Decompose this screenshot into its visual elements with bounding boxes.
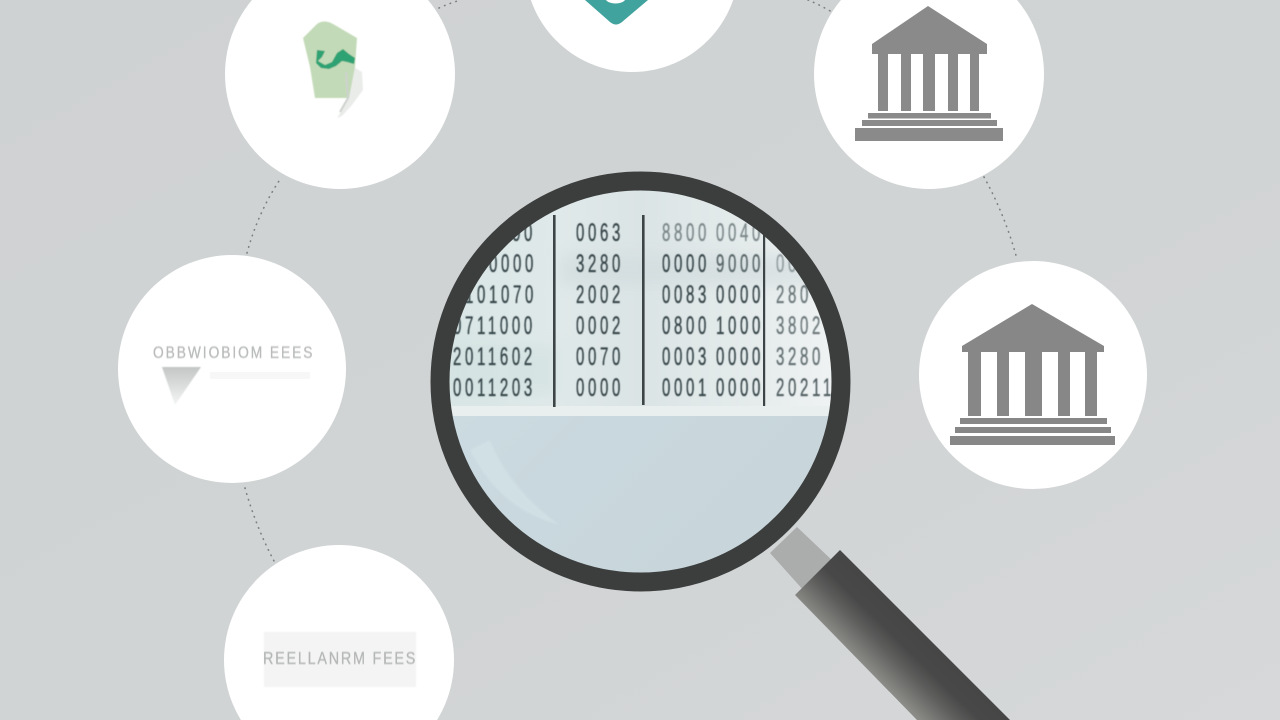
lens with ledger table [440,185,840,585]
ledger digits: 00 [776,250,800,278]
ledger paper [450,190,832,406]
ledger digits: 0083 [662,281,710,309]
ledger digits: 00 [512,219,536,247]
label: bottom fee text: REELLANRM FEES [263,649,417,668]
ledger digits: 0040 [716,219,764,247]
panel: right bank circle [919,261,1147,489]
ledger digits: 101070 [465,281,537,309]
ledger digits: 0000 [716,281,764,309]
ledger digits: 0063 [576,219,624,247]
icon: pale triangle [162,367,201,405]
ledger digits: 0000 [576,374,624,402]
ledger digits: 3280 [776,343,824,371]
panel: bottom-left fee circle [224,545,454,720]
ledger digits: 2002 [576,281,624,309]
icon: green banknote tag [303,22,363,118]
panel: top-centre tag circle [525,0,739,72]
ledger digits: 3280 [576,250,624,278]
icon: teal tag [585,0,648,24]
magnifying glass [440,181,1010,720]
ledger digits: 1000 [716,312,764,340]
ledger digits: 8800 [662,219,710,247]
label: left fee text: OBBWIOBIOM EEES [153,344,314,362]
ledger digits: 0800 [662,312,710,340]
handle grip [795,550,1010,720]
ledger digits: 0003 [662,343,710,371]
dotted connector arcs [245,0,1017,561]
ledger digits: 0000 [662,250,710,278]
icon: bank building [950,304,1115,445]
panel: top-left money circle [225,0,455,189]
ledger digits: 0001 [662,374,710,402]
icon: bank building [855,6,1003,141]
ledger digits: 0711000 [453,312,536,340]
handle neck [770,527,835,592]
lens highlight [528,506,550,520]
column dividers [553,215,765,407]
pale line under text [210,372,310,379]
lens ring [440,181,841,582]
panel: left fee circle [118,255,346,483]
ledger digits: 280 [776,281,812,309]
ledger digits: 0002 [576,312,624,340]
panel: top-right bank circle [814,0,1044,189]
ledger digits: 20211 [776,374,835,402]
ledger digits: 0000 [716,343,764,371]
pale label box [264,632,416,687]
ledger digits: 3802 [776,312,824,340]
ledger digits: 30011203 [441,374,536,402]
ledger digits: 9000 [716,250,764,278]
ledger digits: 0000 [489,250,537,278]
ledger digits: 0070 [576,343,624,371]
ledger digits: 0000 [716,374,764,402]
ledger digits [441,219,835,402]
ledger digits: 2011602 [453,343,536,371]
